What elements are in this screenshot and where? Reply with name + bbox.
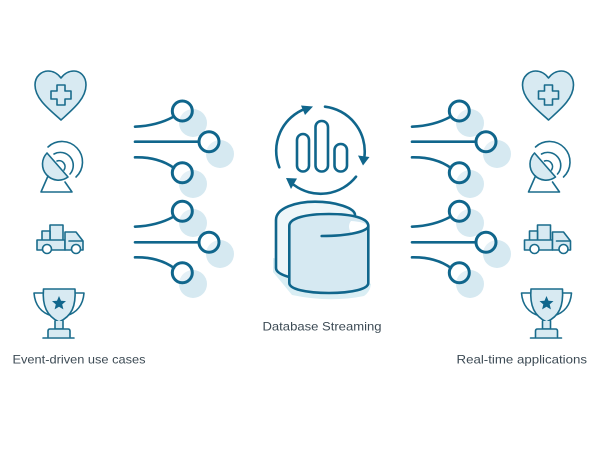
icon: heart with medical cross (35, 71, 86, 120)
connector lines (412, 117, 475, 268)
icon: satellite dish (528, 141, 570, 192)
connector nodes (449, 101, 496, 283)
shadow circles (179, 109, 234, 298)
icon: bar chart (297, 121, 347, 172)
connector nodes (172, 101, 219, 283)
right connector group (412, 101, 511, 298)
right column: real-time applications (456, 71, 587, 366)
label: real-time applications: Real-time applications (456, 352, 587, 366)
label: event-driven use cases: Event-driven use cases (12, 352, 146, 366)
icon: delivery truck (524, 225, 570, 254)
center: database streaming (262, 106, 382, 334)
connector lines (135, 117, 198, 268)
icon: trophy with star (522, 289, 572, 338)
icon: heart with medical cross (522, 71, 574, 120)
icon: trophy with star (34, 289, 84, 338)
icon: delivery truck (37, 225, 83, 254)
icon: circular refresh arrows (276, 106, 370, 194)
left connector group (135, 101, 234, 298)
label: database streaming: Database Streaming (262, 320, 382, 334)
shadow circles (456, 109, 511, 298)
icon: stacked database cylinders (273, 202, 371, 299)
icon: satellite dish (41, 141, 83, 192)
left column: event-driven use cases (12, 71, 146, 366)
